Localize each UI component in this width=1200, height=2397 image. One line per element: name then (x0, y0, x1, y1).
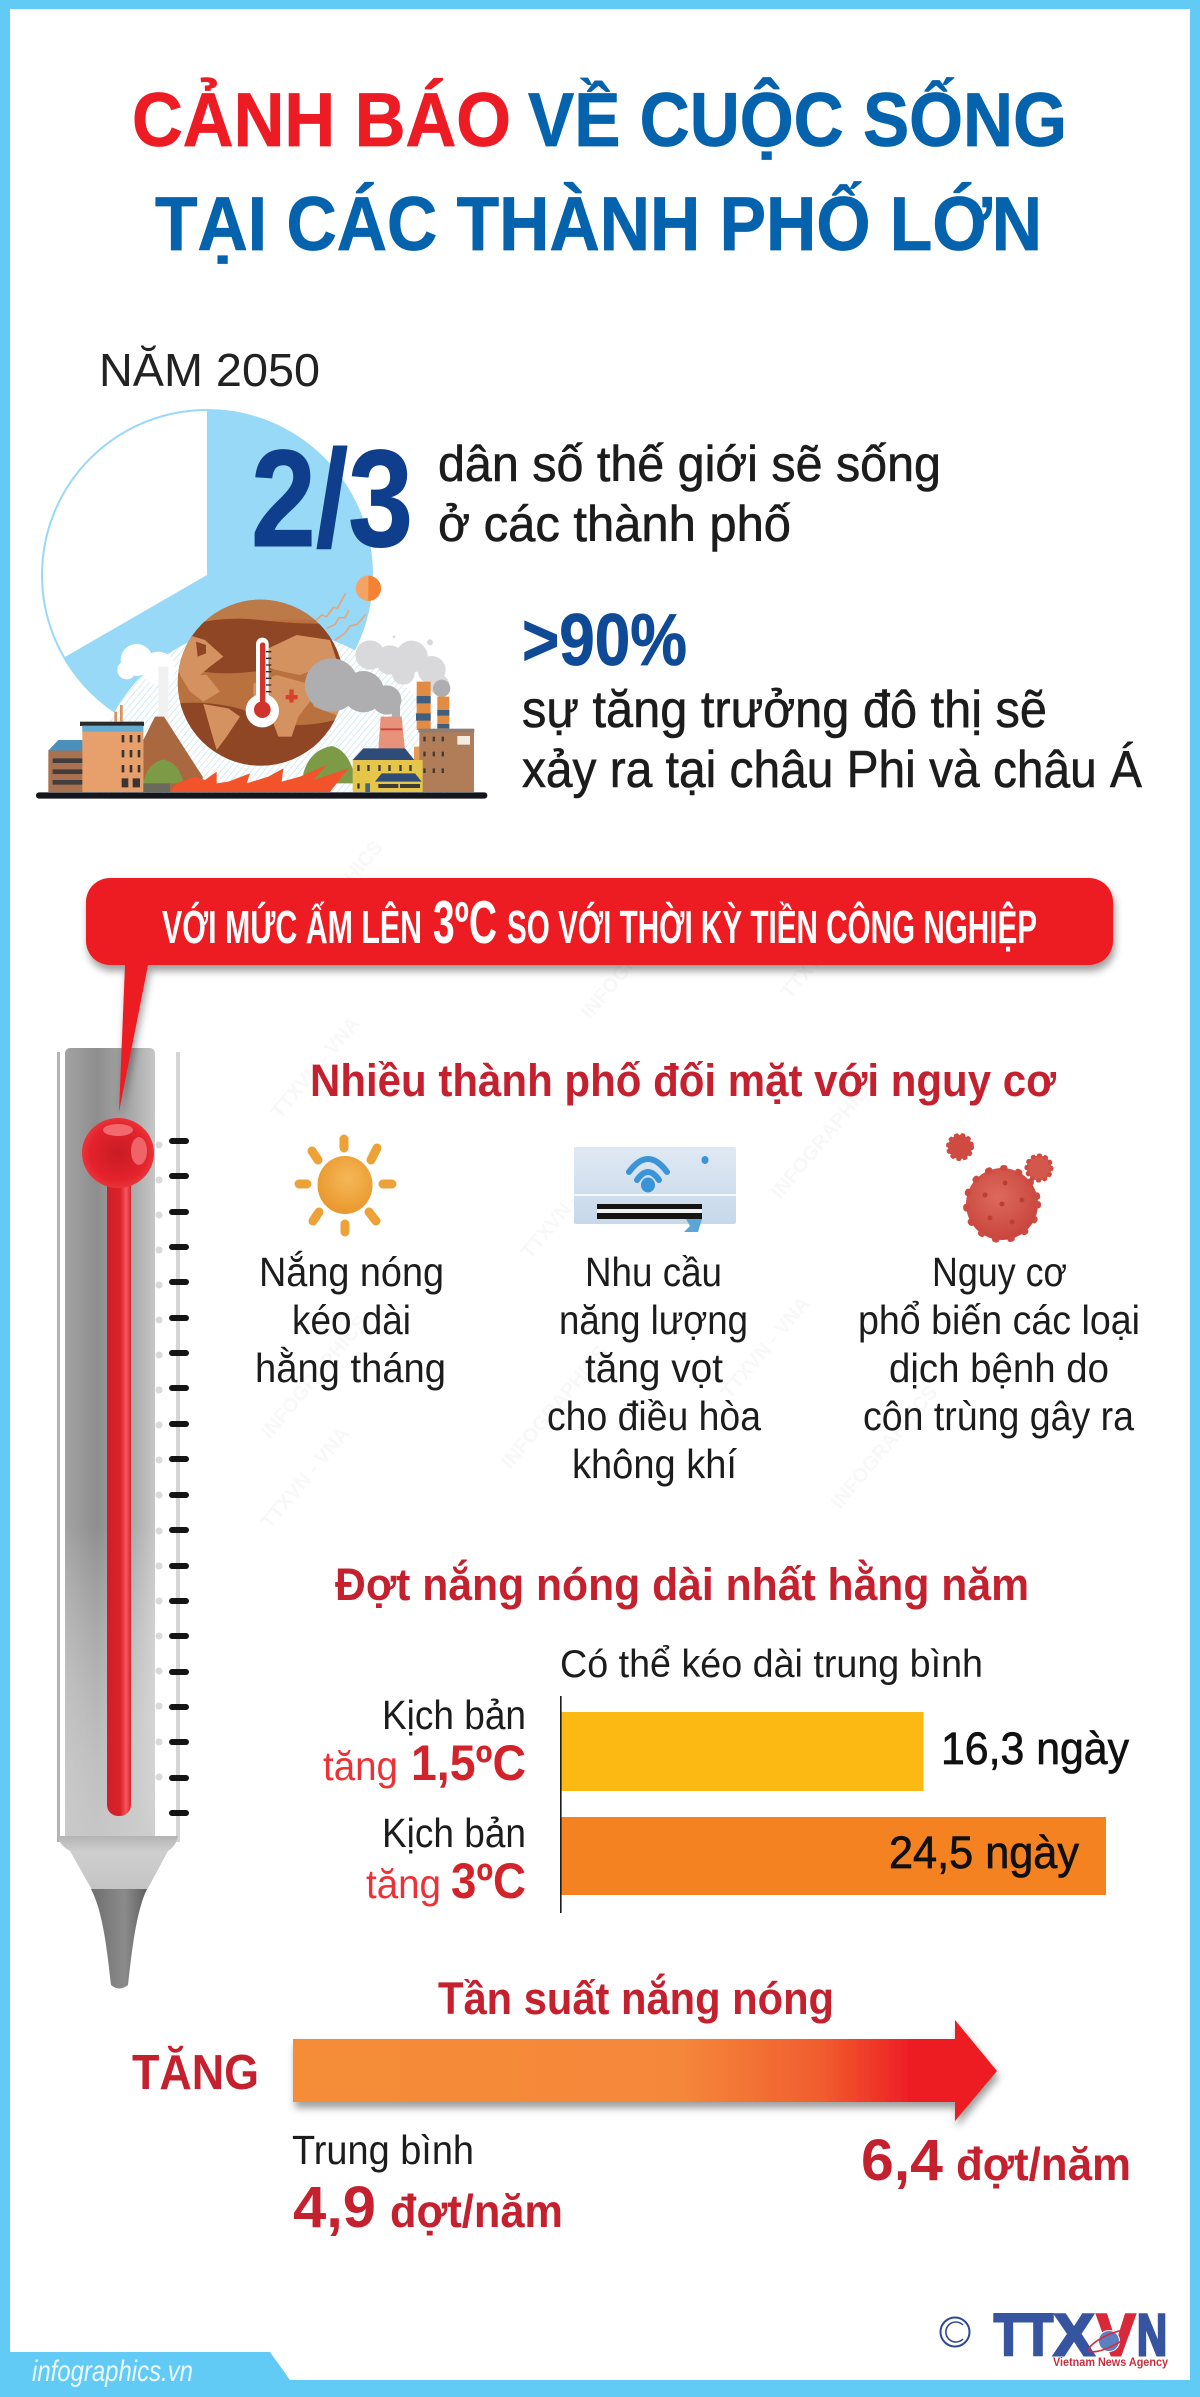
year label: NĂM 2050 (99, 344, 320, 396)
metal tip (91, 1889, 147, 1988)
value: 6.4 per year: đợt/năm (956, 2138, 1131, 2190)
value: 24.5 days: 24,5 ngày (889, 1827, 1079, 1878)
text: urban growth (522, 681, 1142, 799)
text: city population: ở các thành phố (438, 496, 791, 552)
title: CẢNH BÁO (132, 78, 511, 163)
watermark: TTXVN - VNA (777, 893, 875, 1003)
bar chart: heatwave length (560, 1696, 1129, 1913)
text: heat for months: kéo dài (292, 1297, 411, 1343)
chart subtitle: Có thể kéo dài trung bình (560, 1643, 983, 1686)
globe thermometer (246, 638, 279, 727)
banner text: 3ºC (433, 889, 497, 956)
title (132, 78, 1067, 267)
text: energy demand: Nhu cầu (585, 1249, 722, 1295)
scenario label: 3 degrees: 3ºC (451, 1853, 526, 1909)
text: energy demand: năng lượng (559, 1297, 748, 1343)
text: city population (438, 436, 941, 552)
value: 4.9 per year: 4,9 (293, 2175, 376, 2240)
ground (36, 792, 487, 799)
value: 4.9 per year (293, 2175, 563, 2240)
logo: TTXVN: T (994, 2303, 1023, 2368)
banner text (162, 889, 1037, 956)
watermark: INFOGRAPHICS (827, 1382, 942, 1513)
text: insect-borne disease: Nguy cơ (932, 1249, 1067, 1295)
heading: frequency: Tần suất nắng nóng (438, 1973, 834, 2024)
scenario label: 3 degrees: tăng (366, 1861, 441, 1907)
watermark: INFOGRAPHICS (257, 1312, 372, 1443)
text: energy demand: tăng vọt (585, 1345, 724, 1391)
lower neck (58, 1836, 178, 1890)
logo: TTXVN: X (1054, 2303, 1094, 2368)
title: VỀ CUỘC SỐNG (528, 78, 1067, 163)
value: 6.4 per year (861, 2128, 1131, 2193)
stat: over 90 percent: >90% (522, 600, 687, 681)
icon: sun (356, 576, 381, 601)
text: average: Trung bình (292, 2127, 474, 2173)
light smoke (355, 635, 449, 695)
scenario label: 1.5 degrees: tăng (323, 1743, 398, 1789)
logo: TTXVN (994, 2303, 1169, 2369)
dark smoke (305, 658, 450, 720)
watermark: INFOGRAPHICS (497, 1342, 612, 1473)
thermometer (57, 1044, 189, 1988)
scenario label: 3 degrees (366, 1810, 526, 1909)
tube body (57, 1044, 182, 1838)
hatched sky dome (88, 623, 465, 793)
bar: 3 degrees (561, 1817, 1106, 1895)
scenario label: 1.5 degrees: Kịch bản (382, 1692, 526, 1738)
copyright mark (940, 2318, 970, 2346)
cooling tower (378, 717, 405, 750)
source: infographics.vn: infographics.vn (32, 2355, 193, 2388)
value: 16.3 days: 16,3 ngày (941, 1723, 1129, 1774)
text: urban growth: sự tăng trưởng đô thị sẽ (522, 681, 1047, 739)
title: TẠI CÁC THÀNH PHỐ LỚN (155, 182, 1042, 267)
text: insect-borne disease: côn trùng gây ra (863, 1393, 1134, 1439)
watermark: TTXVN - VNA (517, 1153, 615, 1263)
globe (177, 598, 347, 773)
text: insect-borne disease: dịch bệnh do (889, 1345, 1109, 1391)
heading: longest heatwave: Đợt nắng nóng dài nhất hằng năm (335, 1559, 1029, 1610)
banner text: VỚI MỨC ẤM LÊN (162, 901, 422, 953)
scenario label: 3 degrees: Kịch bản (382, 1810, 526, 1856)
text: energy demand: cho điều hòa (547, 1393, 761, 1439)
text: insect-borne disease: phổ biến các loại (858, 1297, 1140, 1343)
heat waves (313, 593, 366, 640)
logo: TTXVN: T (1023, 2303, 1053, 2368)
text: heat for months: Nắng nóng (259, 1249, 444, 1295)
bar: 1.5 degrees (561, 1712, 924, 1791)
text: heat for months (255, 1249, 446, 1391)
scenario label: 1.5 degrees (323, 1692, 526, 1791)
watermark: TTXVN - VNA (267, 1013, 365, 1123)
logo: TTXVN: V (1097, 2303, 1135, 2368)
value: 6.4 per year: 6,4 (861, 2128, 943, 2193)
watermark: TTXVN - VNA (257, 1423, 355, 1533)
red cross (286, 689, 298, 703)
illustration: warming globe and city (36, 576, 487, 799)
logo: TTXVN: N (1137, 2303, 1167, 2368)
flames (170, 765, 348, 792)
icon: air conditioner (574, 1147, 736, 1232)
watermark: TTXVN - VNA (717, 1293, 815, 1403)
text: urban growth: xảy ra tại châu Phi và châu Á (522, 741, 1142, 799)
continents (177, 635, 343, 750)
value: 4.9 per year: đợt/năm (390, 2185, 563, 2237)
watermark: INFOGRAPHICS (577, 892, 692, 1023)
watermark (257, 837, 942, 1533)
text: insect-borne disease (858, 1249, 1140, 1439)
label: increase: TĂNG (132, 2046, 259, 2100)
scale dots (156, 1142, 162, 1780)
text: city population: dân số thế giới sẽ sống (438, 436, 941, 492)
stat: 2/3: 2/3 (251, 422, 413, 576)
text: energy demand (547, 1249, 761, 1487)
arrow (293, 2020, 997, 2121)
white cloud (117, 644, 175, 723)
pie chart: two thirds (42, 410, 372, 740)
heading: risks: Nhiều thành phố đối mặt với nguy cơ (310, 1055, 1056, 1106)
banner box with pointer (86, 878, 1113, 1112)
red bulb (82, 1118, 154, 1188)
axis (560, 1696, 562, 1913)
yellow house (353, 748, 423, 792)
factory (414, 682, 474, 792)
scale ticks (169, 1138, 189, 1816)
text: energy demand: không khí (572, 1441, 738, 1487)
bushes (143, 746, 357, 792)
banner callout (86, 878, 1113, 1112)
scenario label: 1.5 degrees: 1,5ºC (411, 1735, 526, 1791)
red stem (107, 1170, 131, 1816)
left buildings (48, 705, 144, 792)
icon: sun (299, 1139, 392, 1232)
watermark: INFOGRAPHICS (767, 1072, 882, 1203)
icon: virus (948, 1135, 1052, 1240)
text: heat for months: hằng tháng (255, 1345, 446, 1391)
logo: TTXVN: Vietnam News Agency (1053, 2357, 1169, 2369)
watermark: INFOGRAPHICS (272, 837, 387, 968)
mountain (143, 717, 203, 792)
